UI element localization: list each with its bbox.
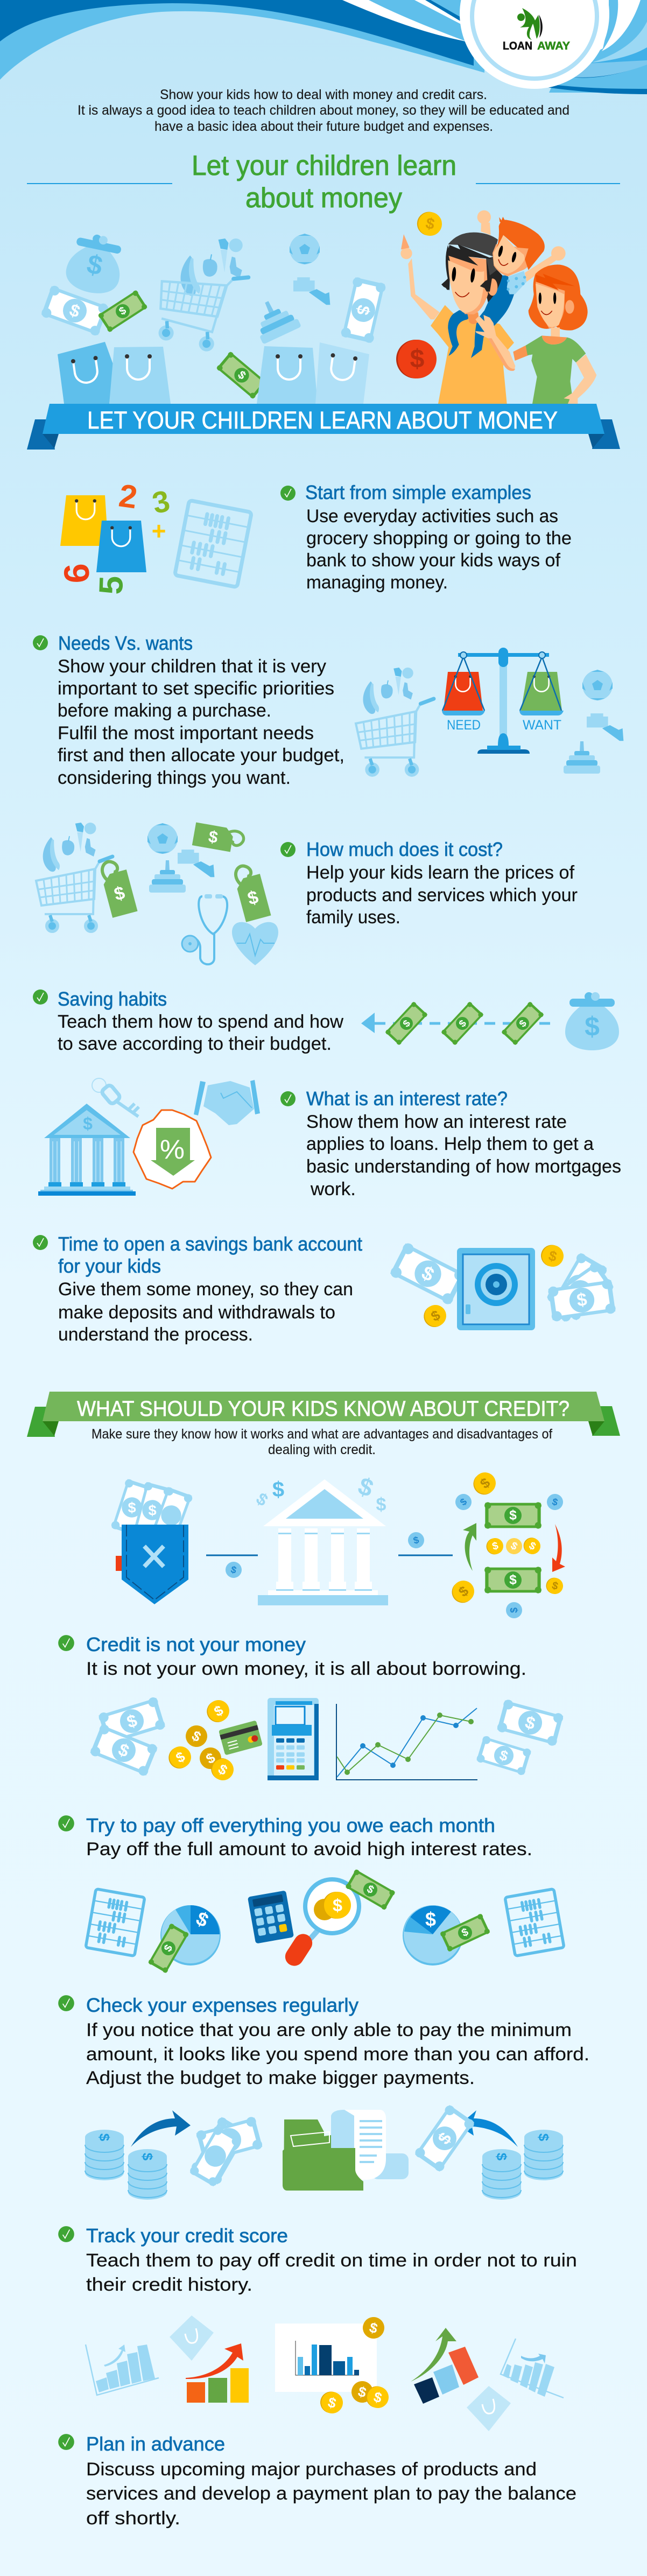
icon: small coin: [224, 1560, 243, 1580]
father face: [448, 256, 488, 314]
icon: green bill bottom: [216, 351, 268, 399]
heading: Start from simple examples: [305, 481, 531, 503]
banner: credit: [27, 1392, 620, 1437]
arrow: green: [463, 1523, 476, 1571]
icon: key: [92, 1078, 139, 1117]
body text: [86, 2250, 577, 2295]
illustration: coin stacks, bills, folder: $: [536, 2133, 552, 2142]
illustration: abacus, pies, calculator, magnifier: $: [193, 1907, 212, 1932]
logo: [460, 0, 609, 89]
body text: managing money.: [306, 572, 448, 593]
illustration: bags and numbers: 6: [56, 563, 97, 584]
illustration: charts and coins: $: [372, 2389, 384, 2406]
icon: magnifier: $: [333, 1896, 342, 1915]
icon: check: [58, 2226, 74, 2242]
logo figure: [517, 8, 543, 40]
icon: pocket with bills: $: [148, 1502, 157, 1518]
heading: Needs Vs. wants: [58, 632, 193, 654]
icon: white bill: $: [67, 300, 83, 321]
illustration: bills, coins, terminal, chart: $: [189, 1727, 204, 1745]
illustration: abacus, pies, calculator, magnifier: $: [365, 1883, 376, 1896]
icon: green bill bottom: $: [235, 368, 248, 382]
icon: white bank: $: [376, 1494, 386, 1515]
icon: check: [280, 486, 296, 501]
illustration: charts and coins: $: [326, 2394, 338, 2411]
connector: [206, 1555, 258, 1556]
illustration: bills, coins, terminal, chart: $: [498, 1747, 510, 1765]
father back hair: [446, 245, 502, 303]
money cycle: [447, 1468, 565, 1618]
icon: check: [58, 1995, 74, 2011]
icon: toy blocks: [293, 277, 330, 305]
icon: pocket with bills: [110, 1478, 193, 1604]
icon: magnifier: [282, 1879, 359, 1969]
icon: check: [58, 1635, 74, 1651]
body text: family uses.: [306, 907, 400, 928]
icon: small coin: [406, 1531, 426, 1550]
illustration: bags and numbers: 3: [149, 483, 173, 520]
icon: yellow coin: [415, 209, 444, 238]
illustration: charts and coins: $: [356, 2383, 368, 2400]
icon: red coin: [396, 340, 437, 378]
illustration: bills, coins, terminal, chart: $: [124, 1710, 139, 1732]
item: how much does it cost: [36, 822, 578, 965]
illustration: bills, coins, terminal, chart: $: [215, 1760, 230, 1779]
item: start from simple examples: [56, 478, 572, 595]
banner: credit: WHAT SHOULD YOUR KIDS KNOW ABOUT CREDIT?: [77, 1397, 569, 1421]
kid sleeve: [507, 271, 526, 294]
heading: Plan in advance: [86, 2433, 225, 2455]
heading: Track your credit score: [86, 2224, 288, 2247]
icon: check: [33, 635, 48, 650]
illustration: coin stacks, bills, folder: $: [139, 2153, 156, 2161]
chart: light right: [501, 2339, 564, 2398]
icon: check: [33, 989, 48, 1005]
illustration: bags and numbers: [56, 478, 251, 595]
illustration: safe with bills and coins: $: [428, 1307, 443, 1325]
arrow: red: [552, 1524, 565, 1572]
illustration: bags and numbers: +: [152, 517, 166, 545]
bills: $: [509, 1573, 517, 1588]
illustration: cart, tags, stethoscope: [36, 822, 278, 965]
icon: white bank: $: [355, 1471, 377, 1503]
illustration: safe with bills and coins: [389, 1241, 616, 1331]
body text: Fulfil the most important needs: [58, 723, 314, 743]
illustration: abacus, pies, calculator, magnifier: [86, 1869, 564, 1974]
icon: red coin: $: [410, 345, 425, 374]
body text: Pay off the full amount to avoid high interest rates.: [86, 1839, 532, 1859]
body text: If you notice that you are only able to pay the minimum: [86, 2020, 572, 2040]
icon: white bank: $: [272, 1478, 284, 1501]
icon: white bank: $: [252, 1489, 272, 1510]
hero illustration: shopping items: [40, 209, 444, 404]
chart: lines: [336, 1704, 477, 1780]
body text: important to set specific priorities: [58, 678, 334, 699]
illustration: coin stacks, bills, folder: $: [434, 2129, 455, 2148]
illustration: coin stacks, bills, folder: $: [222, 2129, 236, 2151]
icon: cart: [148, 256, 249, 355]
chart: color bars: [186, 2343, 249, 2403]
icon: handshake: [194, 1080, 260, 1125]
illustration: abacus, pies, calculator, magnifier: $: [460, 1926, 470, 1939]
logo wordmark: LOAN: [503, 40, 532, 52]
body text: Teach them how to spend and how: [58, 1012, 343, 1032]
body text: Show them how an interest rate: [306, 1112, 567, 1132]
icon: purse: [62, 230, 128, 298]
body text: Discuss upcoming major purchases of products and: [86, 2459, 537, 2480]
illustration: safe with bills and coins: $: [418, 1262, 438, 1286]
item: pay off everything: [58, 1814, 564, 1974]
item: credit is not your money: [58, 1633, 564, 1784]
intro paragraph: have a basic idea about their future budget and expenses.: [154, 119, 493, 134]
icon: check: [33, 1235, 48, 1250]
illustration: bills, coins, terminal, chart: $: [173, 1748, 188, 1766]
illustration: bills, coins, terminal, chart: $: [116, 1739, 132, 1761]
heading: What is an interest rate?: [306, 1087, 508, 1110]
icon: green bill: $: [117, 305, 129, 318]
body text: services and develop a payment plan to pay the balance: [86, 2483, 576, 2504]
family illustration: [400, 210, 596, 404]
body text: Teach them to pay off credit on time in order not to ruin: [86, 2250, 577, 2271]
kid face: [493, 244, 531, 276]
heading: Credit is not your money: [86, 1633, 306, 1655]
body text: before making a purchase.: [58, 700, 271, 721]
icon: discount badge: [133, 1110, 211, 1189]
credit intro text: Make sure they know how it works and what are advantages and disadvantages of: [92, 1427, 552, 1442]
illustration: abacus, pies, calculator, magnifier: $: [162, 1943, 175, 1954]
heading: Check your expenses regularly: [86, 1994, 358, 2016]
item: needs vs wants: [33, 632, 623, 788]
icon: pyramid toy: [248, 293, 301, 345]
credit intro text: dealing with credit.: [268, 1442, 376, 1457]
body text: basic understanding of how mortgages: [306, 1156, 621, 1177]
body text: their credit history.: [86, 2275, 252, 2295]
kid body: [448, 276, 514, 358]
item: track credit score: [58, 2224, 577, 2431]
illustration: bags and numbers: 5: [93, 575, 130, 595]
connector: [398, 1555, 453, 1556]
title: Let your children learn: [192, 150, 456, 181]
item: what is an interest rate: [38, 1078, 621, 1199]
illustration: bills, coins, terminal, chart: [89, 1696, 564, 1784]
logo badge circle: [460, 0, 609, 89]
body text: work.: [310, 1179, 356, 1199]
kid arms: [481, 222, 491, 235]
kid hair: [497, 220, 545, 270]
coins: $: [458, 1496, 469, 1508]
icon: balance scale: NEED: [447, 718, 481, 733]
heading: Try to pay off everything you owe each month: [86, 1814, 495, 1836]
item: savings bank account: [33, 1233, 616, 1345]
body text: understand the process.: [58, 1324, 253, 1345]
item: saving habits: [33, 988, 619, 1054]
coins: $: [491, 1540, 500, 1553]
icon: white bill upright: $: [353, 303, 374, 317]
coins: $: [509, 1540, 519, 1553]
intro paragraph: It is always a good idea to teach children about money, so they will be educated and: [78, 103, 569, 118]
body text: [58, 1279, 353, 1345]
heading: How much does it cost?: [306, 838, 503, 860]
illustration: safe with bills and coins: $: [575, 1289, 588, 1311]
icon: yellow coin: $: [424, 215, 436, 233]
icon: cart with food: [356, 668, 434, 775]
arrow with bills and purse: $: [456, 1017, 468, 1029]
illustration: abacus, pies, calculator, magnifier: $: [425, 1908, 436, 1931]
body text: Help your kids learn the prices of: [306, 862, 575, 883]
body text: amount, it looks like you spend more than you can afford.: [86, 2044, 589, 2065]
icon: pocket with bills: $: [128, 1499, 136, 1515]
heading: [58, 1233, 362, 1277]
icon: check: [58, 1815, 74, 1831]
icon: folder with paper: [283, 2110, 409, 2191]
coins: $: [509, 1608, 519, 1613]
body text: first and then allocate your budget,: [58, 745, 344, 766]
icon: white bill upright: [340, 276, 386, 344]
icon: bags right: [257, 342, 369, 404]
heading: for your kids: [58, 1255, 161, 1277]
icon: balance scale: [442, 648, 564, 754]
arrow with bills and purse: [361, 992, 619, 1050]
body text: It is not your own money, it is all about borrowing.: [86, 1659, 526, 1679]
intro paragraph: Show your kids how to deal with money and credit cars.: [160, 87, 487, 102]
icon: white bill: [40, 284, 109, 337]
illustration: coin stacks, bills, folder: $: [96, 2133, 112, 2142]
credit intro text: [92, 1427, 552, 1457]
icon: discount badge: %: [160, 1134, 185, 1164]
icon: small coin: $: [412, 1534, 420, 1546]
icon: balance scale: WANT: [523, 718, 561, 733]
coins: $: [477, 1475, 494, 1492]
bills: [484, 1502, 541, 1594]
icon: calculator: [248, 1890, 294, 1944]
father arm: [408, 258, 440, 319]
body text: [86, 2459, 576, 2529]
icon: check: [280, 842, 296, 857]
coins: $: [455, 1583, 472, 1600]
body text: [58, 656, 344, 788]
body text: [306, 1112, 621, 1199]
body text: Show your children that it is very: [58, 656, 326, 677]
heading: Time to open a savings bank account: [58, 1233, 362, 1255]
body text: [306, 506, 572, 593]
body text: make deposits and withdrawals to: [58, 1302, 335, 1323]
icon: food: [181, 238, 243, 296]
icon: bank: [38, 1104, 136, 1196]
icon: bank: $: [83, 1114, 93, 1133]
heading: Saving habits: [58, 988, 167, 1010]
item: check expenses: [58, 1994, 589, 2200]
illustration: cart, tags, stethoscope: $: [207, 827, 219, 847]
body text: [58, 1012, 343, 1054]
illustration: cart, tags, stethoscope: $: [245, 887, 261, 909]
arrow with bills and purse: $: [400, 1017, 412, 1029]
body text: considering things you want.: [58, 768, 291, 788]
body text: off shortly.: [86, 2508, 180, 2529]
icon: check: [280, 1091, 296, 1106]
icon: small coin: $: [230, 1564, 237, 1576]
illustration: bills, coins, terminal, chart: $: [523, 1712, 537, 1733]
coins: $: [527, 1540, 538, 1553]
mother: [513, 265, 596, 404]
body text: Adjust the budget to make bigger payments.: [86, 2068, 475, 2088]
icon: card terminal: [268, 1698, 319, 1780]
item: plan in advance: [58, 2433, 576, 2529]
illustration: coin stacks, bills, folder: $: [494, 2153, 510, 2161]
icon: green bill: [97, 290, 148, 333]
body text: bank to show your kids ways of: [306, 550, 561, 571]
header waves: [0, 0, 647, 94]
coins: [447, 1468, 565, 1618]
chart: tilted bars: [411, 2328, 479, 2404]
father hair: [448, 233, 498, 257]
chart: light left: [86, 2345, 159, 2395]
illustration: bank, key, discount badge, handshake: [38, 1078, 260, 1196]
title: about money: [245, 183, 402, 214]
father hand: [475, 315, 515, 371]
body text: grocery shopping or going to the: [306, 528, 572, 549]
bills: $: [509, 1508, 517, 1523]
father shirt: [431, 305, 514, 404]
logo: AWAY: [537, 40, 570, 52]
illustration: charts and coins: [86, 2315, 564, 2431]
father neck: [467, 312, 479, 324]
body text: products and services which your: [306, 885, 578, 906]
title: [192, 150, 456, 214]
illustration: bills, coins, terminal, chart: $: [211, 1702, 226, 1720]
banner: let your children: LET YOUR CHILDREN LEARN ABOUT MONEY: [87, 406, 558, 434]
icon: check: [58, 2434, 74, 2450]
body text: Give them some money, so they can: [58, 1279, 353, 1300]
illustration: pocket, bank, money cycle: [110, 1468, 565, 1618]
icon: purse: $: [85, 249, 106, 281]
body text: applies to loans. Help them to get a: [306, 1134, 594, 1154]
coins: $: [551, 1580, 559, 1592]
banner: let your children: [27, 404, 620, 450]
body text: to save according to their budget.: [58, 1034, 332, 1054]
illustration: bills, coins, terminal, chart: $: [203, 1749, 218, 1767]
illustration: bags and numbers: 2: [117, 478, 139, 515]
icon: ball: [290, 234, 320, 264]
arrow with bills and purse: $: [585, 1012, 600, 1042]
chart: white card: [275, 2324, 377, 2392]
icon: white bank: [252, 1471, 388, 1605]
body text: [86, 2020, 589, 2088]
illustration: coin stacks, bills, folder: [85, 2104, 563, 2200]
illustration: cart, tags, stethoscope: $: [112, 882, 127, 905]
intro paragraph: [78, 87, 569, 134]
illustration: safe with bills and coins: $: [547, 1247, 559, 1265]
icons: ball, blocks, pyramid: [564, 670, 623, 774]
arrow with bills and purse: $: [517, 1017, 529, 1029]
body text: Use everyday activities such as: [306, 506, 558, 527]
coins: $: [551, 1496, 559, 1508]
illustration: charts and coins: $: [368, 2319, 379, 2336]
body text: [306, 862, 578, 928]
icon: bags left: [58, 342, 171, 404]
